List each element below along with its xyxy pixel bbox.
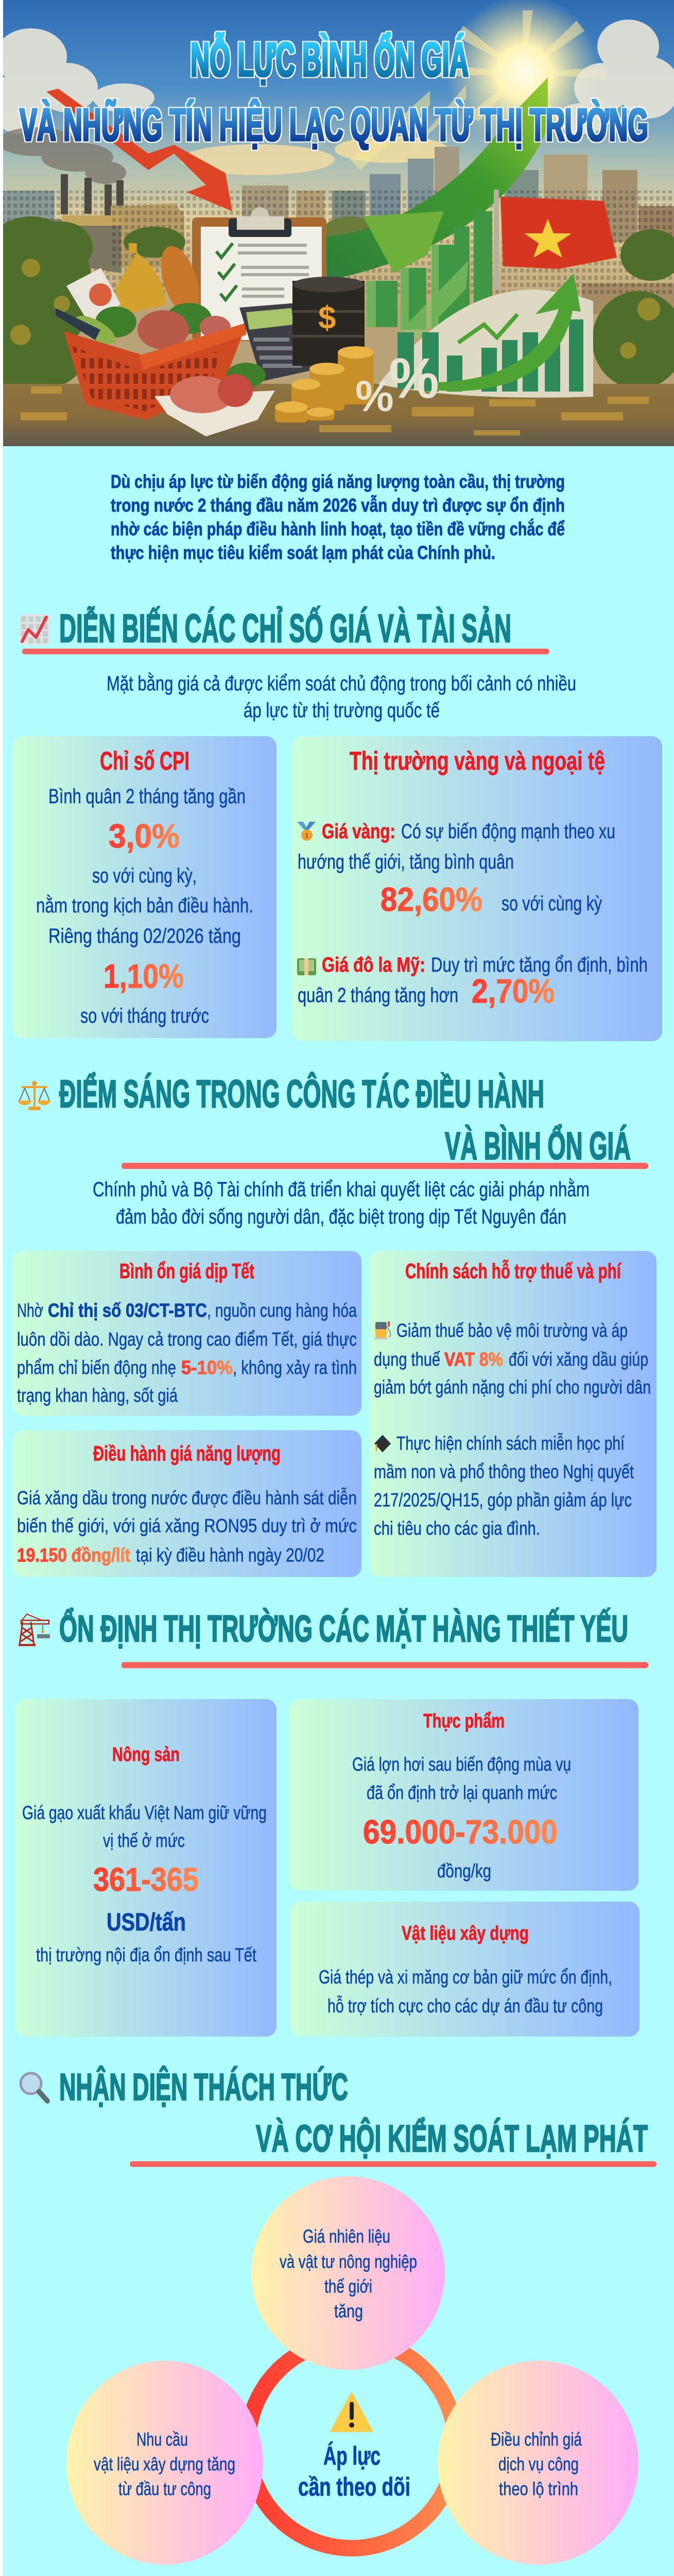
section heading: price indices [19,606,549,654]
panel: CPI: Chỉ số CPI [100,747,189,775]
panel: food: Giá lợn hơi sau biến động mùa vụ [352,1754,571,1775]
small rising chart [378,274,593,398]
centre label: cần theo dõi [298,2472,410,2501]
icon: crane [19,1614,50,1646]
intro text [111,471,565,563]
section heading: challenges and opportunities: NHẬN DIỆN THÁCH THỨC [59,2066,348,2108]
panel: construction materials: Vật liệu xây dựng [402,1923,529,1944]
icon: magnifier [21,2073,47,2101]
percent signs [355,347,439,420]
panel: gold and forex [292,736,662,1041]
panel: agricultural products: USD/tấn [107,1909,186,1936]
bubble: construction demand: Nhu cầu [136,2429,188,2450]
intro text: thực hiện mục tiêu kiểm soát lạm phát của Chính phủ. [111,542,495,563]
centre label: Áp lực [323,2442,381,2470]
panel: tax and fee support: chi tiêu cho các gia đình. [374,1518,540,1539]
panel: CPI: nằm trong kịch bản điều hành. [36,894,253,917]
red falling arrow [46,89,232,211]
icon: fuel pump [374,1321,390,1340]
panel: energy price management: Giá xăng dầu trong nước được điều hành sát diễn [17,1487,357,1509]
panel: tax and fee support: dụng thuế [374,1349,440,1370]
panel: gold and forex: Giá đô la Mỹ: [322,954,425,976]
intro text: trong nước 2 tháng đầu năm 2026 vẫn duy trì được sự ổn định [111,495,565,516]
panel: Tet price stabilisation: 5-10% [181,1357,233,1378]
panel: gold and forex: so với cùng kỳ [502,892,602,915]
panel: food [289,1699,638,1891]
panel: Tet price stabilisation: Chỉ thị số 03/CT-BTC [48,1300,207,1321]
big green rising arrow [326,77,548,281]
intro text: Dù chịu áp lực từ biến động giá năng lượng toàn cầu, thị trường [111,471,565,492]
grocery basket [56,242,247,420]
panel: CPI: 3,0% [109,817,180,855]
panel: Tet price stabilisation [13,1251,361,1416]
panel: Tet price stabilisation: luôn dồi dào. Ngay cả trong cao điểm Tết, giá thực [17,1329,357,1350]
oil barrel: $ [318,300,336,336]
panel: Tet price stabilisation: trạng khan hàng, sốt giá [17,1385,178,1406]
section heading: essential goods [19,1608,648,1668]
ground [3,384,674,446]
panel: tax and fee support: VAT 8% [444,1349,503,1370]
panel: agricultural products: vị thế ở mức [103,1830,185,1851]
panel: CPI: so với cùng kỳ, [92,865,197,887]
panel: agricultural products: Giá gạo xuất khẩu Việt Nam giữ vững [22,1802,267,1823]
panel: gold and forex: 82,60% [381,880,482,918]
panel: agricultural products: Nông sản [112,1744,180,1766]
panel: construction materials [290,1902,640,2037]
diagram: pressures to watch [66,2176,638,2565]
section 1 subtitle: áp lực từ thị trường quốc tế [244,699,440,722]
panel: CPI: 1,10% [103,957,184,995]
panel: CPI: Bình quân 2 tháng tăng gần [48,785,246,808]
panel: CPI: so với tháng trước [80,1005,209,1027]
panel: energy price management: 19.150 đồng/lít [17,1545,130,1566]
calculator [239,303,314,381]
panel: food: 69.000-73.000 [363,1813,558,1851]
panel: food: đồng/kg [437,1860,491,1882]
section 1 subtitle [107,672,576,722]
bubble: construction demand: vật liệu xây dựng tăng [94,2453,235,2475]
panel: energy price management: biến thế giới, với giá xăng RON95 duy trì ở mức [17,1515,357,1536]
tray of meat [154,363,275,436]
icon: graduation cap [374,1435,391,1452]
bubble: construction demand [66,2361,263,2565]
panel: construction materials: hỗ trợ tích cực cho các dự án đầu tư công [327,1995,603,2016]
panel: gold and forex: hướng thế giới, tăng bình quân [298,851,514,873]
intro text: nhờ các biện pháp điều hành linh hoạt, tạo tiền đề vững chắc để [111,518,565,539]
bubble: fuel and materials: Giá nhiên liệu [303,2226,390,2247]
percent signs: % [355,372,394,420]
section heading: challenges and opportunities [21,2066,656,2167]
bubble: public service pricing: dịch vụ công [498,2453,579,2475]
clipboard with checklist [192,207,326,341]
panel: food: đã ổn định trở lại quanh mức [367,1782,557,1803]
panel: Tet price stabilisation: , nguồn cung hàng hóa [207,1300,357,1321]
icon: medal [297,822,316,841]
section heading: bright spots [18,1072,648,1169]
bubble: fuel and materials: tăng [334,2300,363,2321]
icon: warning [331,2393,372,2431]
panel: CPI: Riêng tháng 02/2026 tăng [48,925,241,947]
panel: energy price management [13,1430,361,1577]
panel: agricultural products: thị trường nội địa ổn định sau Tết [36,1944,257,1965]
panel: Tet price stabilisation: Nhờ [17,1300,43,1321]
panel: energy price management: tại kỳ điều hành ngày 20/02 [136,1545,324,1566]
panel: agricultural products: 361-365 [93,1861,199,1898]
icon: money [297,958,316,975]
panel: agricultural products [15,1699,276,2037]
bubble: fuel and materials: thế giới [324,2276,372,2297]
bubble: construction demand: từ đầu tư công [118,2478,211,2499]
panel: gold and forex: quân 2 tháng tăng hơn [298,984,458,1007]
green bar columns [367,211,492,330]
bubble: public service pricing: theo lộ trình [499,2478,578,2499]
icon: chart [19,614,50,645]
panel: Tet price stabilisation: , không xảy ra tình [233,1357,357,1378]
ring [248,2340,456,2548]
title [20,32,648,151]
bubble: fuel and materials: và vật tư nông nghiệp [280,2251,417,2272]
hero illustration [0,0,674,446]
bubble: public service pricing [438,2361,638,2565]
bubble: fuel and materials [251,2176,445,2370]
percent signs: % [389,347,439,410]
icon: balance scale [18,1081,50,1110]
icon: medal: 1 [305,832,308,839]
panel: food: Thực phẩm [423,1710,505,1732]
panel: tax and fee support [369,1251,656,1577]
panel: energy price management: Điều hành giá năng lượng [93,1442,281,1465]
Vietnam flag [494,190,617,290]
section 2 subtitle [93,1178,590,1228]
centre label [298,2442,410,2501]
panel: Tet price stabilisation: phẩm chỉ biến động nhẹ [17,1357,176,1378]
panel: gold and forex: 2,70% [472,972,555,1010]
bubble: public service pricing: Điều chỉnh giá [491,2429,582,2450]
gold coins [275,346,374,422]
skyline [3,147,674,314]
panel: CPI [13,736,276,1038]
panel: gold and forex: Giá vàng: [322,820,395,843]
panel: Tet price stabilisation: Bình ổn giá dịp Tết [119,1259,254,1283]
trees [0,216,674,392]
oil barrel [292,277,365,366]
